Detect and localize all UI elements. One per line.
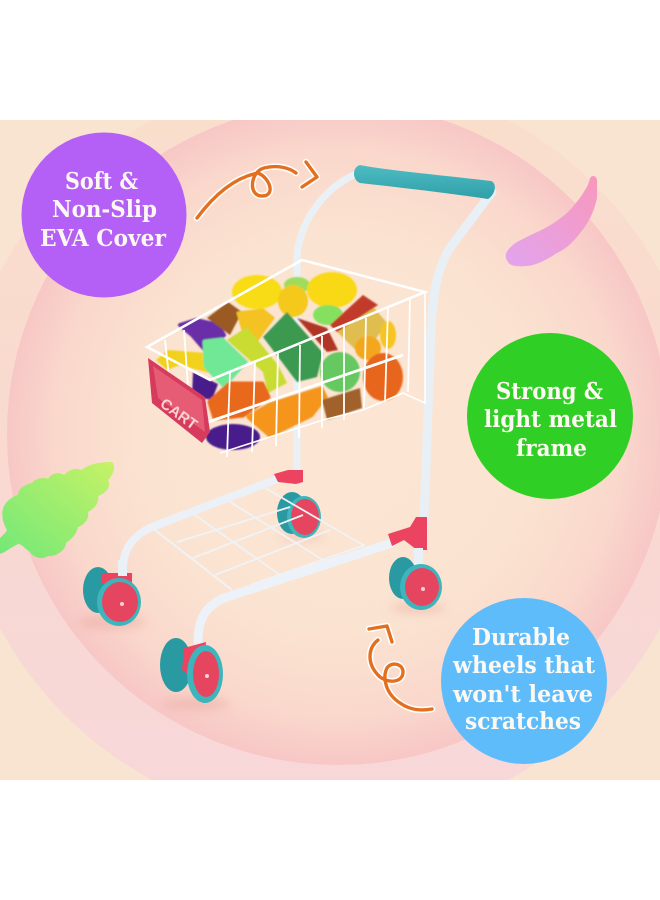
cart sign: CART bbox=[157, 395, 200, 433]
callout: soft EVA cover: EVA Cover bbox=[40, 225, 167, 252]
groceries bbox=[156, 272, 403, 450]
callout: metal frame: light metal bbox=[484, 406, 617, 433]
callout: durable wheels: won't leave bbox=[452, 681, 593, 708]
wheel: front left bbox=[83, 560, 141, 626]
red joint: rear bbox=[274, 470, 303, 484]
callout: soft EVA cover bbox=[22, 132, 186, 298]
arrow: to wheels bbox=[369, 626, 432, 710]
callout: durable wheels: scratches bbox=[465, 708, 581, 735]
callout: metal frame bbox=[467, 333, 633, 499]
under-tray grid bbox=[155, 485, 365, 590]
stem: right wheel bbox=[414, 548, 423, 570]
callout: soft EVA cover: Soft & bbox=[65, 168, 138, 195]
callout: durable wheels bbox=[441, 598, 607, 764]
wheel: front center bbox=[160, 638, 223, 703]
red joint: front bbox=[388, 517, 427, 550]
arrow: to handle bbox=[197, 162, 317, 218]
lower frame tubes bbox=[123, 478, 280, 572]
rear wheel bbox=[277, 492, 321, 538]
rear upright bbox=[297, 174, 356, 478]
callout: metal frame: Strong & bbox=[496, 378, 603, 405]
callout: durable wheels: Durable bbox=[472, 624, 570, 651]
wire basket bbox=[147, 260, 425, 457]
shopping cart bbox=[78, 165, 495, 710]
background band bbox=[0, 120, 660, 780]
callout: durable wheels: wheels that bbox=[452, 652, 595, 679]
callout: soft EVA cover: Non-Slip bbox=[52, 196, 157, 223]
wheel: right bbox=[389, 557, 442, 610]
decoration: chili bbox=[506, 176, 597, 266]
cart sign bbox=[148, 358, 210, 443]
decoration: leaf bbox=[0, 462, 114, 558]
callout: metal frame: frame bbox=[516, 435, 587, 462]
front upright bbox=[423, 192, 492, 545]
cart shadows bbox=[78, 532, 446, 710]
handle: teal EVA cover bbox=[354, 165, 495, 199]
infographic canvas bbox=[0, 120, 660, 780]
